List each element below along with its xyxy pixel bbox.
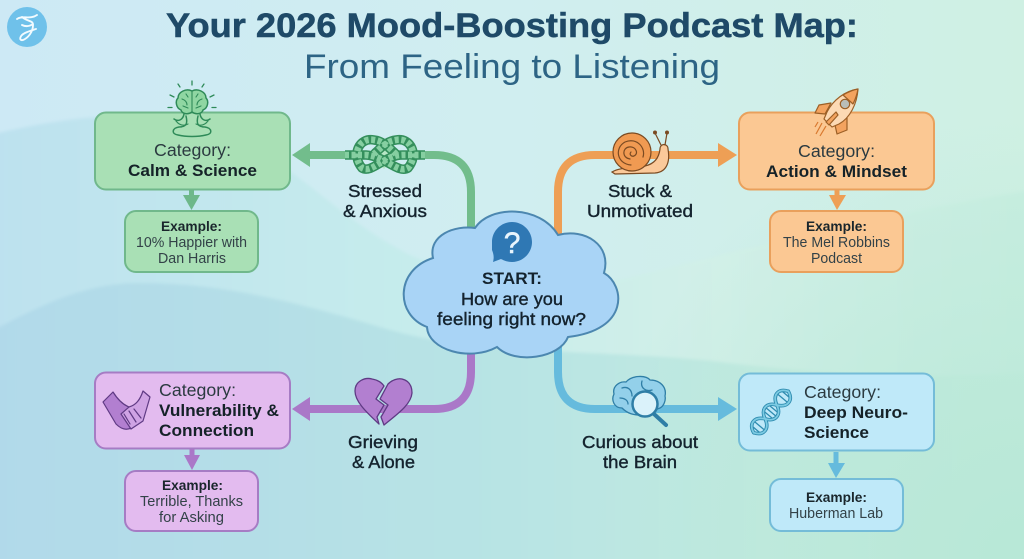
panel: vulnerability and connection example xyxy=(125,471,258,531)
panel: vulnerability and connection example: for Asking xyxy=(159,510,224,526)
icon: holding hands xyxy=(103,391,150,429)
panel: start cloud: How are you xyxy=(461,289,563,309)
panel: deep neuroscience example: Huberman Lab xyxy=(789,506,883,522)
arrow: start to curious xyxy=(558,335,737,421)
icon: question bubble: ? xyxy=(504,227,520,260)
icon: rocket xyxy=(815,89,858,136)
panel: action and mindset example: Podcast xyxy=(811,251,862,267)
panel: calm and science example: 10% Happier with xyxy=(136,235,247,251)
panel: start cloud: feeling right now? xyxy=(437,309,586,329)
panel: deep neuroscience example: Example: xyxy=(806,489,867,505)
panel: action and mindset example: The Mel Robbins xyxy=(783,235,890,251)
panel: action and mindset category: Action & Mindset xyxy=(766,162,907,181)
title: From Feeling to Listening xyxy=(304,48,720,86)
panel: deep neuroscience category: Science xyxy=(804,423,869,442)
label: stressed and anxious: & Anxious xyxy=(343,201,427,221)
arrow: start to grieving xyxy=(292,350,471,421)
icon: meditating brain xyxy=(168,81,216,136)
panel: calm and science category: Calm & Science xyxy=(128,161,257,180)
arrow: action category to example xyxy=(829,190,846,210)
arrow: neuroscience category to example xyxy=(828,452,845,478)
icon: brain with magnifier xyxy=(613,376,666,425)
panel: deep neuroscience category: Category: xyxy=(804,382,881,402)
title: Your 2026 Mood-Boosting Podcast Map: xyxy=(166,7,858,45)
icon: DNA helix xyxy=(748,386,794,438)
icon: broken heart xyxy=(355,378,412,425)
arrow: start to stressed xyxy=(292,143,471,232)
panel: vulnerability and connection category: Vulnerability & xyxy=(159,401,279,420)
label: curious about the brain: Curious about xyxy=(582,432,698,452)
panel: action and mindset category: Category: xyxy=(798,141,875,161)
label: stuck and unmotivated: Unmotivated xyxy=(587,201,693,221)
icon: snail xyxy=(612,131,669,174)
panel: calm and science category: Category: xyxy=(154,140,231,160)
panel: action and mindset example xyxy=(770,211,903,272)
title xyxy=(166,7,858,86)
panel: calm and science example xyxy=(125,211,258,272)
label: stressed and anxious xyxy=(343,181,427,221)
label: curious about the brain xyxy=(582,432,698,472)
icon: rope knot xyxy=(345,140,425,169)
panel: start cloud: START: xyxy=(482,269,542,288)
panel: vulnerability and connection example: Example: xyxy=(162,477,223,493)
panel: calm and science example: Dan Harris xyxy=(158,251,226,267)
panel: calm and science example: Example: xyxy=(161,218,222,234)
label: stuck and unmotivated xyxy=(587,181,693,221)
label: stressed and anxious: Stressed xyxy=(348,181,422,201)
panel: action and mindset example: Example: xyxy=(806,218,867,234)
panel: vulnerability and connection category: Category: xyxy=(159,380,236,400)
icon: question bubble xyxy=(492,222,532,262)
label: grieving and alone xyxy=(348,432,418,472)
panel: vulnerability and connection category xyxy=(95,372,290,448)
panel: deep neuroscience example xyxy=(770,479,903,531)
panel: start cloud xyxy=(404,212,618,357)
arrow: calm category to example xyxy=(183,190,200,210)
arrow: vulnerability category to example xyxy=(184,449,200,470)
arrow: start to stuck xyxy=(558,143,737,235)
panel: deep neuroscience category xyxy=(739,374,934,450)
label: curious about the brain: the Brain xyxy=(603,452,677,472)
logo xyxy=(7,7,47,47)
label: grieving and alone: & Alone xyxy=(352,452,415,472)
panel: calm and science category xyxy=(95,112,290,190)
label: stuck and unmotivated: Stuck & xyxy=(608,181,672,201)
label: grieving and alone: Grieving xyxy=(348,432,418,452)
panel: deep neuroscience category: Deep Neuro- xyxy=(804,403,908,422)
panel: action and mindset category xyxy=(739,112,934,190)
panel: vulnerability and connection example: Terrible, Thanks xyxy=(140,494,243,510)
panel: vulnerability and connection category: Connection xyxy=(159,421,254,440)
